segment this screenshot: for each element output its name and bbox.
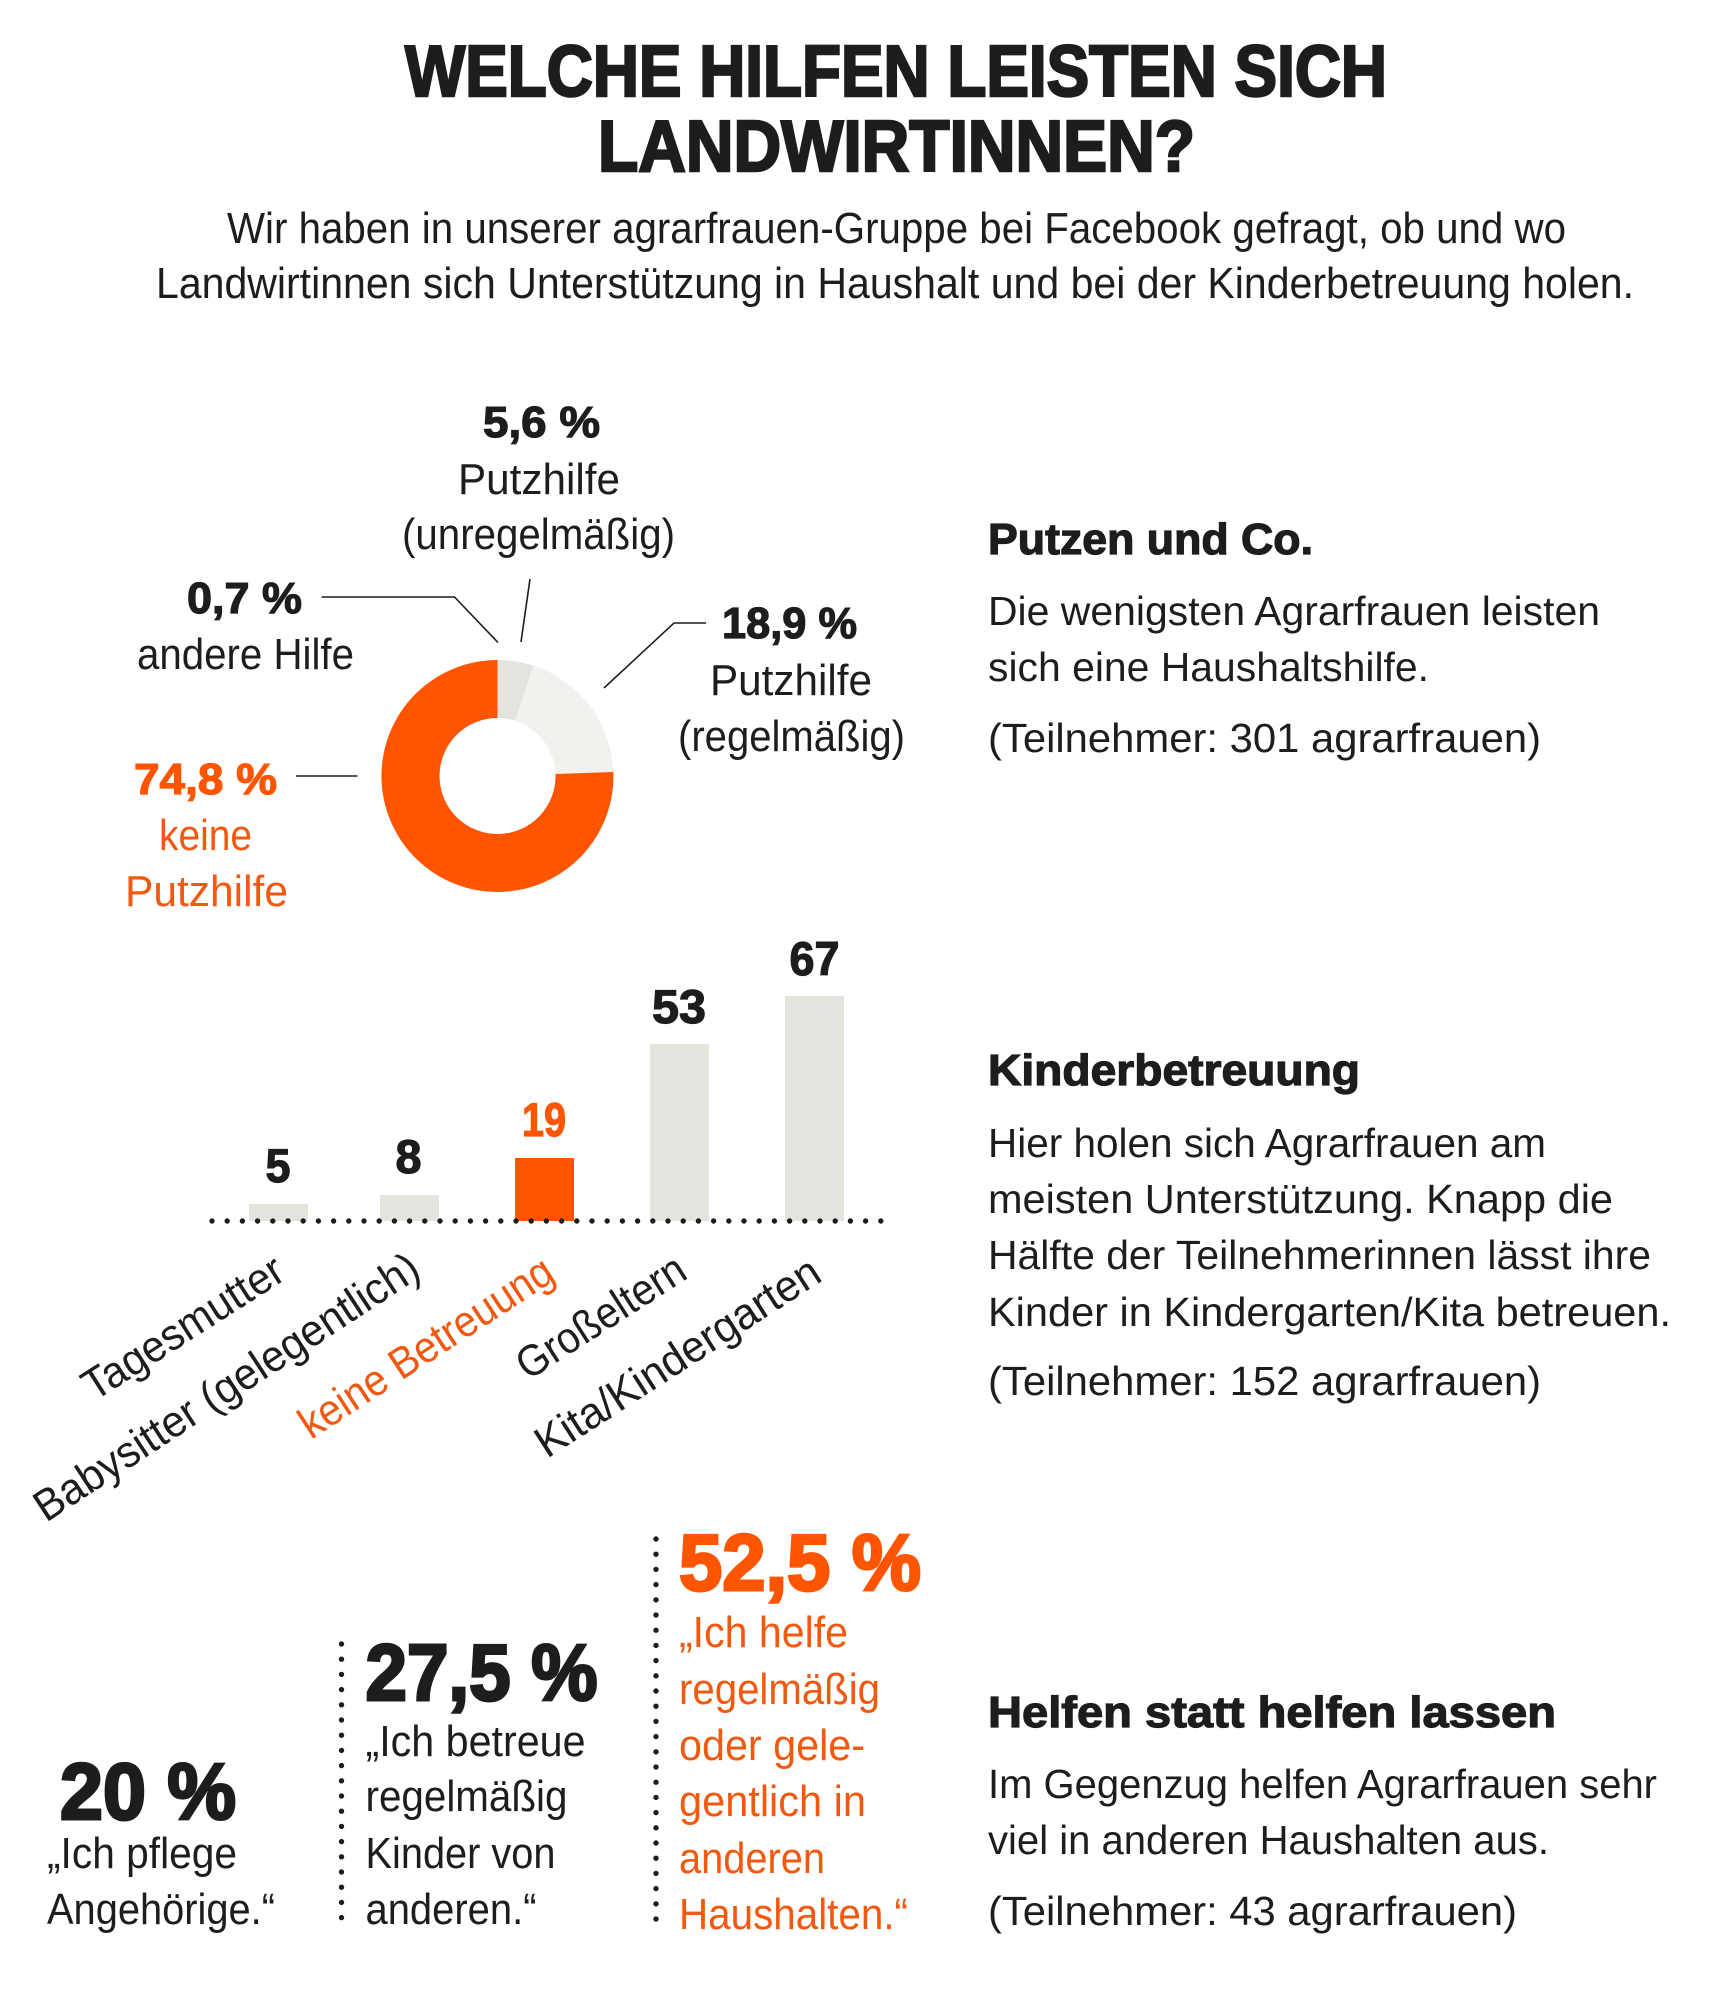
text block: Kinderbetreuung: Hier holen sich Agrarfrauen am (988, 1120, 1546, 1166)
text block: Putzen und Co.: (Teilnehmer: 301 agrarfrauen) (988, 715, 1541, 761)
leader line: 0,7 % (322, 597, 498, 642)
stat: 52,5 %: gentlich in (679, 1777, 866, 1826)
leader line: 18,9 % (604, 623, 706, 688)
bar: Tagesmutter 5 (249, 1204, 308, 1221)
stat: 20 %: Angehörige.“ (47, 1885, 275, 1934)
value: 19: 19 (522, 1093, 566, 1146)
label: 5,6 % Putzhilfe unregelmäßig: 5,6 % (483, 398, 600, 447)
label: 5,6 % Putzhilfe unregelmäßig (402, 398, 675, 559)
stat: 52,5 %: regelmäßig (679, 1665, 880, 1714)
text block: Kinderbetreuung (988, 1046, 1671, 1404)
stat: 27,5 % (366, 1628, 598, 1934)
axis label: Großeltern: Großeltern (507, 1244, 695, 1389)
stat: 27,5 %: „Ich betreue (366, 1717, 586, 1766)
label: 5,6 % Putzhilfe unregelmäßig: (unregelmäßig) (402, 510, 675, 559)
axis label: Kita/Kindergarten: Kita/Kindergarten (526, 1247, 830, 1467)
text block: Kinderbetreuung: Hälfte der Teilnehmerinnen lässt ihre (988, 1232, 1651, 1278)
text block: Putzen und Co.: Die wenigsten Agrarfrauen leisten (988, 588, 1600, 634)
label: 18,9 % Putzhilfe regelmäßig: 18,9 % (722, 599, 857, 648)
stat: 52,5 % (679, 1518, 921, 1939)
title: LANDWIRTINNEN? (598, 107, 1195, 187)
label: 74,8 % keine Putzhilfe: Putzhilfe (125, 867, 288, 916)
stat: 27,5 %: Kinder von (366, 1829, 556, 1878)
label: 74,8 % keine Putzhilfe: 74,8 % (134, 755, 277, 804)
panel: bar chart Kinderbetreuung (25, 932, 888, 1531)
text block: Helfen statt helfen lassen (988, 1688, 1657, 1934)
stat: 52,5 %: 52,5 % (679, 1518, 921, 1607)
text block: Kinderbetreuung: Kinder in Kindergarten/Kita betreuen. (988, 1289, 1671, 1335)
text block: Putzen und Co.: Putzen und Co. (988, 515, 1313, 564)
value: 53: 53 (652, 980, 706, 1033)
label: 0,7 % andere Hilfe: andere Hilfe (137, 630, 354, 679)
text block: Helfen statt helfen lassen: Helfen statt helfen lassen (988, 1688, 1556, 1737)
text block: Putzen und Co. (988, 515, 1600, 761)
stat: 52,5 %: oder gele- (679, 1721, 865, 1770)
bar: Babysitter 8 (380, 1195, 439, 1221)
stat: 27,5 %: 27,5 % (366, 1628, 598, 1717)
stat: 20 % (47, 1747, 275, 1934)
donut slice: Putzhilfe regelmäßig (515, 666, 613, 774)
text block: Kinderbetreuung: meisten Unterstützung. Knapp die (988, 1176, 1613, 1222)
subtitle (156, 204, 1634, 308)
text block: Helfen statt helfen lassen: (Teilnehmer: 43 agrarfrauen) (988, 1888, 1517, 1934)
text block: Helfen statt helfen lassen: Im Gegenzug helfen Agrarfrauen sehr (988, 1761, 1657, 1807)
donut slice: keine Putzhilfe (381, 660, 613, 892)
text block: Kinderbetreuung: Kinderbetreuung (988, 1046, 1360, 1095)
leader line: 5,6 % (521, 579, 530, 642)
axis label: keine Betreuung: keine Betreuung (290, 1246, 562, 1448)
label: 74,8 % keine Putzhilfe: keine (159, 811, 252, 860)
label: 18,9 % Putzhilfe regelmäßig: (regelmäßig) (678, 712, 905, 761)
value: 67: 67 (790, 932, 840, 985)
donut slice: Putzhilfe unregelmäßig and andere Hilfe (498, 660, 533, 721)
stat: 20 %: „Ich pflege (47, 1829, 237, 1878)
bar: Großeltern 53 (650, 1044, 709, 1221)
stat: 52,5 %: anderen (679, 1834, 825, 1883)
title: WELCHE HILFEN LEISTEN SICH (405, 32, 1387, 112)
value: 5: 5 (266, 1139, 290, 1192)
label: 5,6 % Putzhilfe unregelmäßig: Putzhilfe (458, 455, 620, 504)
text block: Helfen statt helfen lassen: viel in anderen Haushalten aus. (988, 1817, 1549, 1863)
stat: 52,5 %: „Ich helfe (679, 1608, 848, 1657)
label: 18,9 % Putzhilfe regelmäßig: Putzhilfe (710, 656, 872, 705)
stat: 52,5 %: Haushalten.“ (679, 1890, 908, 1939)
axis label: Babysitter (gelegentlich): Babysitter (gelegentlich) (25, 1243, 428, 1531)
axis label: Tagesmutter: Tagesmutter (73, 1245, 293, 1410)
subtitle: Wir haben in unserer agrarfrauen-Gruppe bei Facebook gefragt, ob und wo (227, 204, 1566, 253)
stat: 27,5 %: anderen.“ (366, 1885, 536, 1934)
label: 74,8 % keine Putzhilfe (125, 755, 288, 916)
bar: Kita/Kindergarten 67 (785, 996, 844, 1221)
panel: statistics helfen (47, 1518, 921, 1939)
subtitle: Landwirtinnen sich Unterstützung in Haushalt und bei der Kinderbetreuung holen. (156, 259, 1634, 308)
label: 0,7 % andere Hilfe: 0,7 % (187, 574, 302, 623)
panel: donut chart Putzhilfe (125, 398, 905, 916)
text block: Putzen und Co.: sich eine Haushaltshilfe. (988, 644, 1429, 690)
label: 0,7 % andere Hilfe (137, 574, 354, 679)
value: 8: 8 (396, 1130, 422, 1183)
stat: 27,5 %: regelmäßig (366, 1772, 568, 1821)
leader line: 74,8 % (296, 775, 358, 777)
text block: Kinderbetreuung: (Teilnehmer: 152 agrarfrauen) (988, 1358, 1541, 1404)
title (405, 32, 1387, 187)
label: 18,9 % Putzhilfe regelmäßig (678, 599, 905, 761)
bar: keine Betreuung 19 (515, 1158, 574, 1221)
stat: 20 %: 20 % (60, 1747, 236, 1836)
